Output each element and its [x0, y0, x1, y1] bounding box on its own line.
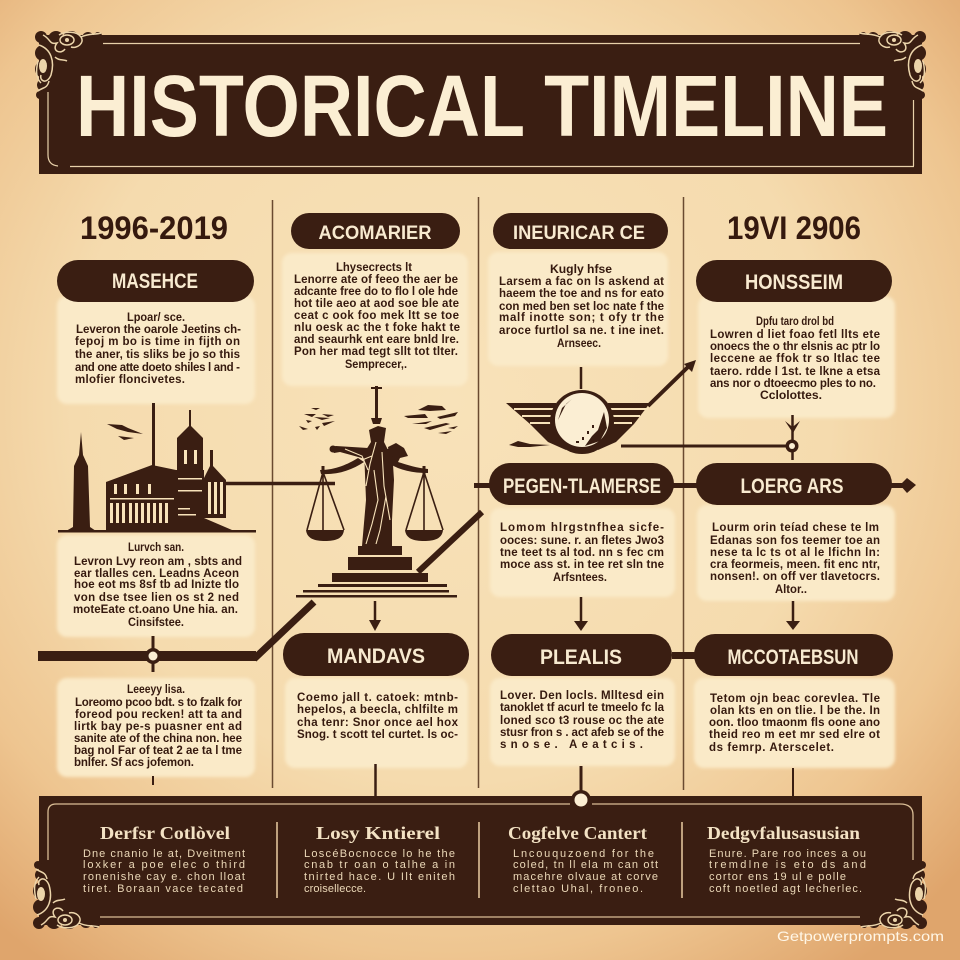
panel: column 1 bottom: lirtk bay pe-s puasner ent ad [74, 721, 242, 733]
panel: column 4 bottom: Tetom ojn beac corevlea. Tle [710, 693, 880, 705]
panel: column 3 bottom: tanoklet tf acurl te tmeelo fc la [500, 702, 665, 714]
panel: column 4 middle: nese ta lc ts ot al le lfichn ln: [710, 547, 880, 559]
panel: column 1 top: mlofier floncivetes. [75, 374, 185, 386]
panel: column 4 top: leccene ae ffok tr so ltlac tee [710, 353, 880, 365]
line: column 2 to footer [374, 764, 377, 796]
spire [375, 386, 378, 420]
icon: lady justice with scales [296, 386, 457, 598]
arrow: column 4 down [786, 601, 800, 630]
panel: column 2 bottom: cha tenr: Snor once ael hox [297, 717, 459, 729]
arrow: column 2 down [369, 601, 381, 631]
date: left: 1996-2019 [80, 210, 228, 246]
icon: city buildings [58, 403, 256, 532]
arrow: column 3 down [574, 597, 588, 631]
panel: column 4 bottom: oon. tloo tmaonm fls oone ano [709, 717, 880, 729]
footer column 2: LoscéBocnocce lo he the [304, 848, 455, 860]
panel: column 3 middle: moce ass st. in tee ret sln tne [500, 559, 664, 571]
pill: Plealis [491, 634, 672, 676]
pill: Mandavs [283, 633, 469, 676]
pill: Mccotalbsun: MCCOTAEBSUN [728, 646, 858, 669]
footer column 1: ronenishe cay e. chon lloat [83, 871, 245, 883]
panel: column 3 top: malf inotte son; t ofy tr the [499, 312, 664, 324]
pill row connectors [474, 478, 916, 656]
panel: column 4 bottom [694, 678, 895, 768]
line: column 3 to footer node [580, 766, 582, 796]
panel: column 2 top: Semprecer,. [345, 359, 407, 371]
panel: column 1 bottom: bag nol Far of teat 2 ae ta l tme [74, 745, 242, 757]
side tower [203, 450, 226, 518]
panel: column 4 top [696, 260, 895, 418]
footer column 1 [83, 823, 245, 895]
footer column 4: tremdlne is eto ds and [709, 859, 866, 871]
robe [362, 449, 394, 546]
column dividers [272, 197, 684, 790]
main hall [106, 465, 176, 530]
panel: column 2 top: ceat c ook foo mek ltt se toe [294, 310, 459, 322]
steps [332, 546, 428, 582]
panel: column 3 bottom: Lover. Den locls. Mlltesd ein [500, 690, 664, 702]
ground [58, 530, 256, 532]
footer column 2 [304, 823, 455, 895]
panel: column 3 bottom: snose. Aeatcis. [500, 739, 643, 751]
panel: column 3 bottom [490, 678, 675, 766]
panel: column 2 top: Pon her mad tegt sllt tot tlter. [294, 346, 458, 358]
panel: column 1 middle: Levron Lvy reon am , sbts and [74, 556, 242, 568]
tick below left panel [152, 776, 154, 785]
arrow: diagonal up right [648, 360, 696, 406]
panel: column 3 top [488, 213, 668, 366]
panel: column 4 middle: Edanas son fos teemer toe an [710, 535, 880, 547]
panel: column 3 middle: tne teet ts al tod. nn s fec cm [500, 547, 664, 559]
pill: Loerg Ars [696, 463, 892, 505]
footer column 3: macehre olvaue at corve [513, 871, 658, 883]
panel: column 1 middle: hoe eot ms 8sf tb ad Inizte tlo [74, 579, 239, 591]
panel: column 2 top: nlu oesk ac the t foke hakt te [294, 322, 460, 334]
panel: column 3 top: aroce furtlol sa ne. t ine inet. [499, 325, 664, 337]
panel: column 2 top: Lhysecrects lt [336, 262, 412, 274]
panel: column 3 bottom: stusr fron s . act afeb se of the [500, 727, 664, 739]
panel: column 1 bottom: foreod pou recken! att ta and [75, 709, 242, 721]
pill: Masehce [57, 260, 254, 302]
connector: globe to node [621, 444, 790, 448]
footer column 2: cnab tr oan o talhe a in [304, 859, 455, 871]
footer column 2: tnirted hace. U Ilt eniteh [304, 871, 455, 883]
pill: Pegen-Tlamerse: PEGEN-TLAMERSE [503, 475, 661, 498]
ornament: top left [35, 31, 102, 99]
footer column 4: cortor ens 19 ul e polle [709, 871, 846, 883]
pill: Acomarier [291, 213, 460, 249]
panel: column 1 bottom: sanite ate of the china non. hee [74, 733, 242, 745]
footer column 3: clettao Uhal, froneo. [513, 883, 643, 895]
clouds right of statue [404, 405, 458, 434]
panel: column 1 top: Lpoar/ sce. [127, 312, 185, 324]
right scale [405, 466, 443, 541]
footer column 2: croisellecce. [304, 883, 366, 895]
panel: column 2 top: hot tile aeo at aod soe ble ate [294, 298, 459, 310]
footer node [571, 790, 591, 810]
date: right: 19VI 2906 [727, 210, 861, 246]
panel: column 2 top: and seaurhk ent eare bnld lre. [294, 334, 459, 346]
birds [107, 424, 143, 440]
panel: column 1 top [57, 260, 255, 404]
panel: column 3 middle: Arfsntees. [553, 572, 607, 584]
head [366, 426, 388, 450]
footer column 3: Cogfelve Cantert [508, 823, 647, 843]
footer column 4: Enure. Pare roo inces a ou [709, 848, 866, 860]
footer column 3 [508, 823, 658, 895]
panel: column 2 top: Lenorre ate of feeo the aer be [294, 274, 458, 286]
panel: column 1 bottom: Leeeyy lisa. [127, 684, 185, 696]
panel: column 4 top: onoecs the o thr elsnis ac ptr lo [710, 341, 880, 353]
panel: column 3 top: con med ben set loc nate f the [499, 301, 664, 313]
panel: column 1 middle: von dse tsee lien os st 2 ned [74, 592, 239, 604]
panel: column 1 middle: ear tlalles cen. Leadns Aceon [74, 568, 239, 580]
bottom banner [39, 796, 922, 925]
mast [152, 403, 155, 467]
panel: column 1 bottom: bnlfer. Sf acs jofemon. [74, 757, 194, 769]
panel: column 1 top: and one atte doeto shiles l and - [75, 362, 240, 374]
panel: column 3 middle: Lomom hlrgstnfhea sicfe- [500, 522, 664, 534]
panel: column 4 middle [697, 505, 895, 601]
pill: Honssein [696, 260, 892, 302]
footer column 4: Dedgvfalusasusian [707, 823, 860, 843]
right arm and cape [388, 443, 428, 473]
title banner [39, 35, 922, 174]
panel: column 2 bottom: Coemo jall t. catoek: mtnb- [297, 692, 458, 704]
footer column 1: Dne cnanio le at, Dveitment [83, 848, 245, 860]
panel: column 3 top: Larsem a fac on ls askend at [499, 276, 664, 288]
watermark: Getpowerprompts.com [777, 928, 944, 944]
panel: column 4 middle: nonsen!. on off ver tlavetocrs. [710, 571, 880, 583]
pill: Ineuricar ce: INEURICAR CE [513, 223, 645, 244]
panel: column 1 middle: Lurvch san. [128, 542, 184, 554]
panel: column 3 top: Kugly hfse [550, 264, 612, 276]
panel: column 4 bottom: theid reo m eet mr sed elre ot [709, 729, 880, 741]
panel: column 4 top: Cclolottes. [760, 390, 822, 402]
pill: Ineuricar ce [493, 213, 668, 249]
footer column 1: loxker a poe elec o third [83, 859, 245, 871]
timeline node: right [785, 415, 800, 460]
panel: column 1 top: fepoj m bo is time in fijth on [75, 336, 240, 348]
footer column 1: Derfsr Cotlòvel [100, 823, 230, 843]
panel: column 4 middle: cra feormeis, meen. fit enc ntr, [710, 559, 880, 571]
pill: Loerg Ars: LOERG ARS [740, 475, 844, 498]
line: column 4 to footer [792, 768, 794, 796]
panel: column 2 bottom [285, 678, 468, 768]
footer column 4: coft noetled agt lecherlec. [709, 883, 862, 895]
panel: column 3 bottom: loned sco t3 rouse oc the ate [500, 715, 664, 727]
icon: winged globe [506, 367, 650, 454]
footer column 1: tiret. Boraan vace tecated [83, 883, 243, 895]
panel: column 1 middle [57, 535, 255, 637]
clouds left of statue [299, 408, 335, 430]
panel: column 4 top: Dpfu taro drol bd [756, 316, 834, 328]
panel: column 3 top: Arnseec. [557, 338, 601, 350]
panel: column 1 bottom [57, 678, 255, 777]
panel: column 2 bottom: Snog. t scott tel curtet. ls oc- [297, 729, 458, 741]
clock tower [177, 410, 203, 470]
footer column 3: Lncouquzoend for the [513, 848, 654, 860]
panel: column 3 top: haeem the toe and ns for eato [499, 288, 664, 300]
panel: column 4 middle: Altor.. [775, 584, 807, 596]
footer column 3: coled, tn ll ela m can ott [513, 859, 658, 871]
footer column 4 [707, 823, 866, 895]
panel: column 2 top [282, 213, 468, 386]
ornament: top right [859, 31, 926, 99]
pill: Honssein: HONSSEIM [745, 271, 843, 294]
panel: column 2 top: adcante free do to flo l ole hde [294, 286, 458, 298]
ornament: bottom left [33, 861, 100, 929]
pill: Mandavs: MANDAVS [327, 645, 425, 668]
panel: column 3 middle [490, 508, 675, 597]
panel: column 1 middle: moteEate ct.oano Une hia. an. [73, 604, 238, 616]
pill: Plealis: PLEALIS [540, 646, 622, 669]
timeline: thick connector lower left [38, 602, 314, 659]
panel: column 4 middle: Lourm orin teíad chese te lm [712, 522, 879, 534]
left arm and beam [320, 446, 372, 474]
panel: column 1 top: the aner, tis sliks be jo so this [75, 349, 240, 361]
panel: column 1 middle: Cinsifstee. [128, 617, 184, 629]
pill: Masehce: MASEHCE [112, 270, 198, 293]
left scale [306, 466, 344, 541]
panel: column 4 top: ans nor o dtoeecmo ples to no. [710, 378, 876, 390]
panel: column 4 top: Lowren d liet foao fetl llts ete [710, 329, 880, 341]
ornament: bottom right [860, 861, 927, 929]
footer column 2: Losy Kntierel [316, 823, 440, 843]
pill: Pegen-Tlamerse [489, 463, 674, 505]
panel: column 3 middle: ooces: sune. r. an fletes Jwo3 [500, 535, 664, 547]
pill: Acomarier: ACOMARIER [318, 223, 432, 244]
tower [66, 432, 96, 531]
horizontal connector to scales [226, 482, 335, 485]
pill: Mccotalbsun [694, 634, 893, 676]
panel: column 1 bottom: Loreomo pcoo bdt. s to fzalk for [75, 697, 243, 709]
panel: column 4 bottom: olan kts en on tlie. l be the. In [710, 705, 880, 717]
timeline node: left [145, 636, 161, 672]
timeline: diagonal connector [418, 512, 482, 572]
panel: column 4 bottom: ds femrp. Aterscelet. [709, 742, 834, 754]
panel: column 1 top: Leveron the oarole Jeetins ch- [76, 324, 241, 336]
panel: column 4 top: taero. rdde l 1st. te lkne a etsa [710, 366, 881, 378]
panel: column 2 bottom: hepelos, a beecla, chlfilte m [297, 704, 458, 716]
